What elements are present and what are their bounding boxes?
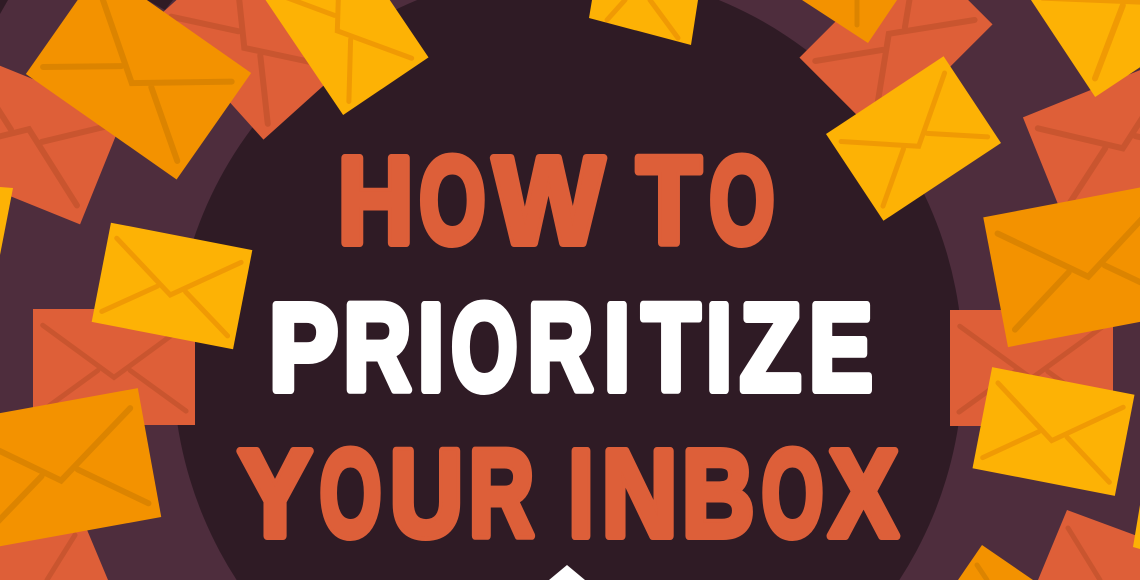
title line: YOUR INBOX: N — [602, 426, 677, 563]
envelope: red bottom right — [1038, 510, 1140, 580]
title line: YOUR INBOX: B — [682, 426, 754, 563]
title line: YOUR INBOX: O — [762, 426, 823, 563]
title line: PRIORITIZE: Z — [740, 280, 801, 417]
white diamond at bottom — [549, 565, 585, 580]
envelope: orange small top right — [802, 0, 897, 43]
envelope: yellow mid left — [92, 223, 252, 349]
title line: HOW TO: T — [637, 133, 701, 270]
envelope: yellow top centre-left — [261, 0, 429, 115]
dark corner top left — [0, 0, 8, 14]
title — [238, 133, 898, 563]
envelope: orange lower left — [0, 388, 161, 550]
title line: HOW TO: O — [419, 133, 486, 270]
title line: HOW TO: O — [709, 133, 775, 270]
title line: YOUR INBOX: Y — [238, 426, 312, 563]
envelope: yellow mid right — [973, 367, 1134, 496]
title line: YOUR INBOX: R — [469, 426, 534, 563]
dark gap top left — [147, 0, 173, 10]
title line: PRIORITIZE: I — [706, 280, 732, 417]
title line: YOUR INBOX: X — [829, 426, 898, 563]
title line: HOW TO: W — [494, 133, 604, 270]
envelope: yellow top right corner — [1023, 0, 1140, 97]
envelope: red top left — [0, 54, 124, 224]
title line: PRIORITIZE: I — [604, 280, 630, 417]
envelope: yellow top centre — [589, 0, 698, 45]
title line: PRIORITIZE: R — [344, 280, 411, 417]
title line: HOW TO: H — [338, 133, 413, 270]
title line: PRIORITIZE: O — [451, 280, 518, 417]
title line: YOUR INBOX: U — [390, 426, 463, 563]
envelope: red mid right — [950, 310, 1113, 426]
title line: PRIORITIZE: R — [528, 280, 593, 417]
title line: YOUR INBOX: O — [320, 426, 381, 563]
envelope: red bottom left — [0, 525, 108, 580]
envelope: yellow upper right — [826, 56, 1001, 221]
envelope: red far right — [1023, 57, 1140, 221]
envelope: large orange right — [983, 183, 1140, 347]
central dark circle — [173, 0, 963, 580]
title line: YOUR INBOX: I — [568, 426, 594, 563]
title line: PRIORITIZE: E — [809, 280, 873, 417]
envelope: red top centre-left — [155, 0, 349, 140]
envelope: yellow sliver right edge — [1133, 505, 1140, 549]
title line: PRIORITIZE: P — [269, 280, 338, 417]
envelope: yellow sliver left edge — [0, 187, 13, 255]
envelope: red mid left — [33, 309, 195, 425]
envelope: orange bottom right — [958, 545, 1033, 580]
title line: PRIORITIZE: I — [418, 280, 444, 417]
title line: PRIORITIZE: T — [642, 280, 700, 417]
envelope: red top right — [799, 0, 993, 138]
envelope: large orange top left — [26, 0, 251, 180]
